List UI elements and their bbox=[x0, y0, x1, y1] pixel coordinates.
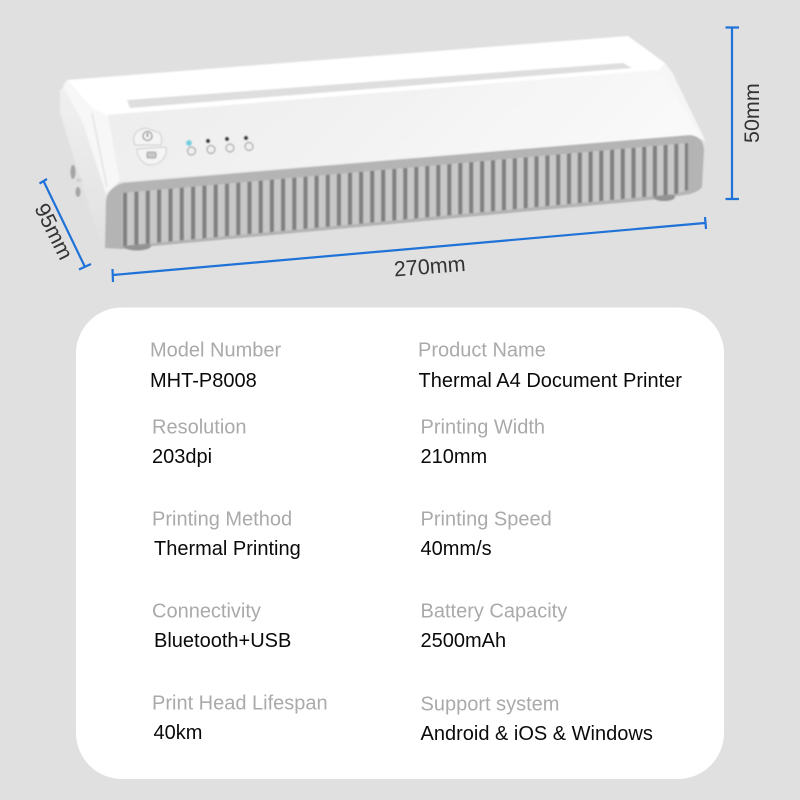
spec: battery capacity: 2500mAh bbox=[420, 630, 506, 652]
indicator lights bbox=[186, 136, 253, 155]
band inner panel bbox=[122, 143, 688, 246]
spec: connectivity bbox=[152, 600, 291, 652]
spec: print head lifespan: Print Head Lifespan bbox=[152, 692, 328, 714]
bevel crease bbox=[92, 113, 107, 187]
spec: product name: Product Name bbox=[418, 340, 546, 362]
printer side face bbox=[60, 87, 110, 250]
spec: support system bbox=[420, 694, 653, 745]
spec: print head lifespan: 40km bbox=[154, 722, 202, 744]
spec: product name bbox=[418, 340, 682, 392]
paper slot bbox=[127, 63, 632, 108]
spec: printing width: 210mm bbox=[420, 446, 487, 468]
panel background bbox=[76, 308, 724, 779]
spec: printing speed: 40mm/s bbox=[420, 538, 492, 560]
dimension: width 270mm: 270mm bbox=[393, 252, 466, 281]
panel: specifications bbox=[76, 308, 724, 779]
side ports bbox=[70, 165, 82, 197]
spec: model number: MHT-P8008 bbox=[150, 370, 257, 392]
spec: product name: Thermal A4 Document Printer bbox=[418, 370, 682, 392]
spec: support system: Support system bbox=[420, 694, 559, 716]
feet bbox=[123, 193, 675, 250]
grey vent band bbox=[105, 135, 704, 249]
printer illustration bbox=[60, 36, 706, 260]
control buttons bbox=[134, 128, 166, 165]
spec: model number: Model Number bbox=[150, 340, 282, 362]
spec: model number bbox=[150, 340, 282, 392]
spec: printing width bbox=[420, 416, 545, 468]
spec: connectivity: Bluetooth+USB bbox=[154, 630, 291, 652]
dimension: width 270mm bbox=[112, 217, 706, 282]
front panel bbox=[108, 70, 704, 182]
right bevel bbox=[660, 63, 706, 142]
spec: printing method: Printing Method bbox=[152, 508, 292, 530]
spec: battery capacity: Battery Capacity bbox=[420, 600, 567, 622]
dimension: depth 95mm bbox=[30, 179, 91, 270]
dimension: height 50mm bbox=[726, 27, 764, 199]
spec: printing speed bbox=[420, 508, 552, 560]
spec: printing width: Printing Width bbox=[420, 416, 545, 438]
spec: battery capacity bbox=[420, 600, 567, 652]
spec: printing speed: Printing Speed bbox=[420, 508, 552, 530]
printer top lid bbox=[67, 36, 665, 115]
spec: resolution bbox=[152, 416, 247, 468]
spec: print head lifespan bbox=[152, 692, 328, 744]
spec: connectivity: Connectivity bbox=[152, 600, 261, 622]
spec: resolution: 203dpi bbox=[152, 446, 212, 468]
spec: support system: Android & iOS & Windows bbox=[420, 723, 653, 745]
spec: printing method bbox=[152, 508, 301, 560]
printer left bevel bbox=[63, 80, 120, 194]
dimension: depth 95mm: 95mm bbox=[30, 200, 78, 264]
dimension: height 50mm: 50mm bbox=[740, 83, 764, 143]
spec: printing method: Thermal Printing bbox=[154, 538, 301, 560]
vent ribs bbox=[122, 142, 689, 246]
spec: resolution: Resolution bbox=[152, 416, 247, 438]
